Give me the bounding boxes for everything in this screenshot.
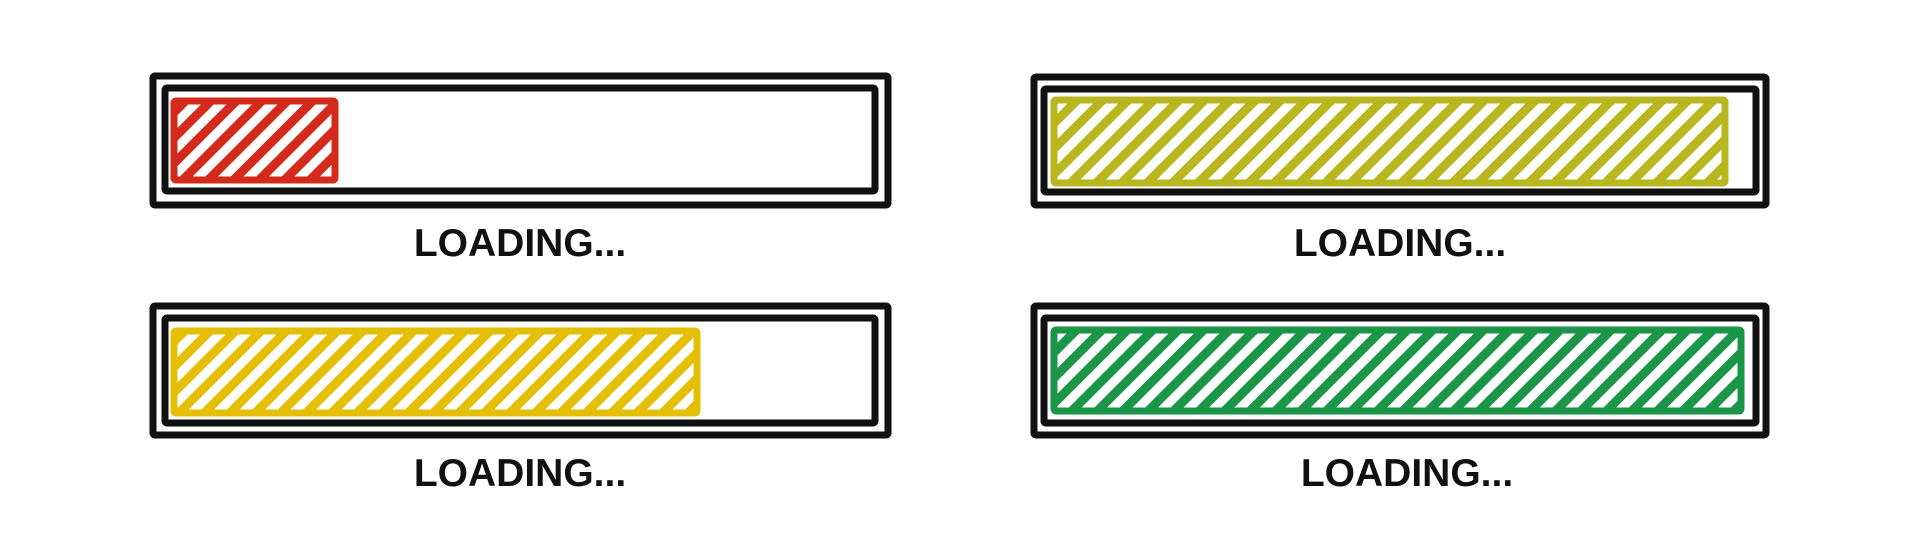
label: loading top-left: LOADING... — [414, 222, 626, 265]
red progress fill — [174, 101, 335, 180]
label: loading bottom-left: LOADING... — [414, 452, 626, 495]
olive progress fill — [1054, 100, 1725, 183]
yellow progress fill — [174, 331, 697, 413]
label: loading bottom-right: LOADING... — [1301, 452, 1513, 495]
label: loading top-right: LOADING... — [1294, 222, 1506, 265]
green progress fill — [1054, 330, 1741, 411]
panel: red loading bar — [153, 76, 888, 205]
panel: green loading bar — [1034, 306, 1766, 435]
panel: yellow loading bar — [153, 306, 888, 435]
panel: olive loading bar — [1034, 77, 1766, 205]
